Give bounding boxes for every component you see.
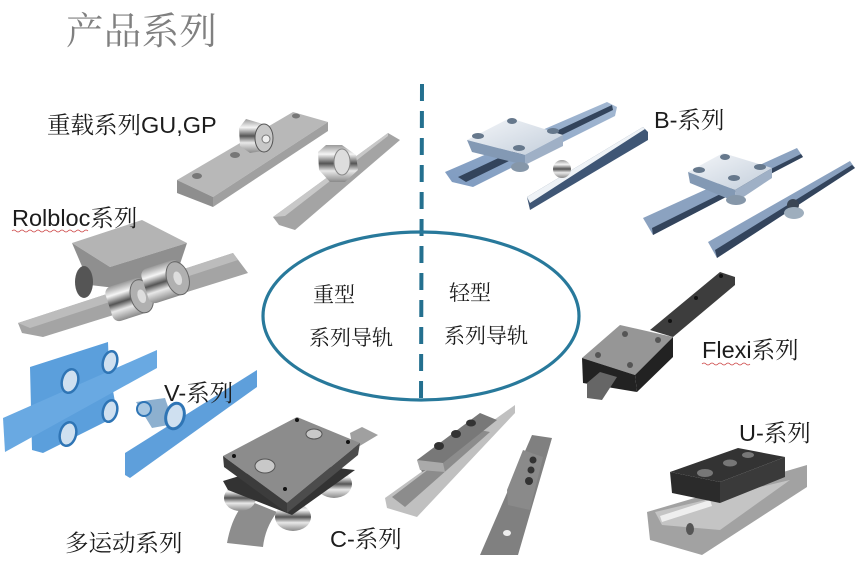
product: U series [647, 448, 807, 555]
center text: light series: 轻型 [449, 282, 491, 305]
label: V series: V-系列 [164, 380, 233, 406]
label: multi-motion: 多运动系列 [65, 530, 182, 556]
product: Flexi series [582, 272, 735, 400]
product: GU/GP heavy rail with roller [177, 112, 400, 230]
label: B series: B-系列 [654, 107, 724, 133]
center text: light series [444, 282, 528, 348]
product: multi-motion series [223, 417, 378, 547]
title: 产品系列 [66, 10, 217, 52]
product: C series rails [385, 405, 552, 555]
product: V series blue rails [3, 342, 257, 478]
label: U series: U-系列 [739, 420, 811, 446]
label: C series: C-系列 [330, 526, 402, 552]
center ellipse [263, 232, 579, 400]
center text: heavy series [309, 284, 393, 350]
label: Rolbloc: Rolbloc系列 [12, 205, 137, 231]
product: B series set 1 [445, 102, 648, 210]
label: GU GP: 重载系列GU,GP [47, 112, 217, 138]
center text: heavy series: 重型 [313, 284, 355, 307]
product: B series set 2 [643, 148, 855, 258]
center text: light series: 系列导轨 [444, 325, 528, 348]
product: Rolbloc carriage [18, 220, 248, 337]
divider: dashed vertical line [421, 84, 422, 402]
label: Flexi: Flexi系列 [702, 337, 799, 363]
center text: heavy series: 系列导轨 [309, 327, 393, 350]
